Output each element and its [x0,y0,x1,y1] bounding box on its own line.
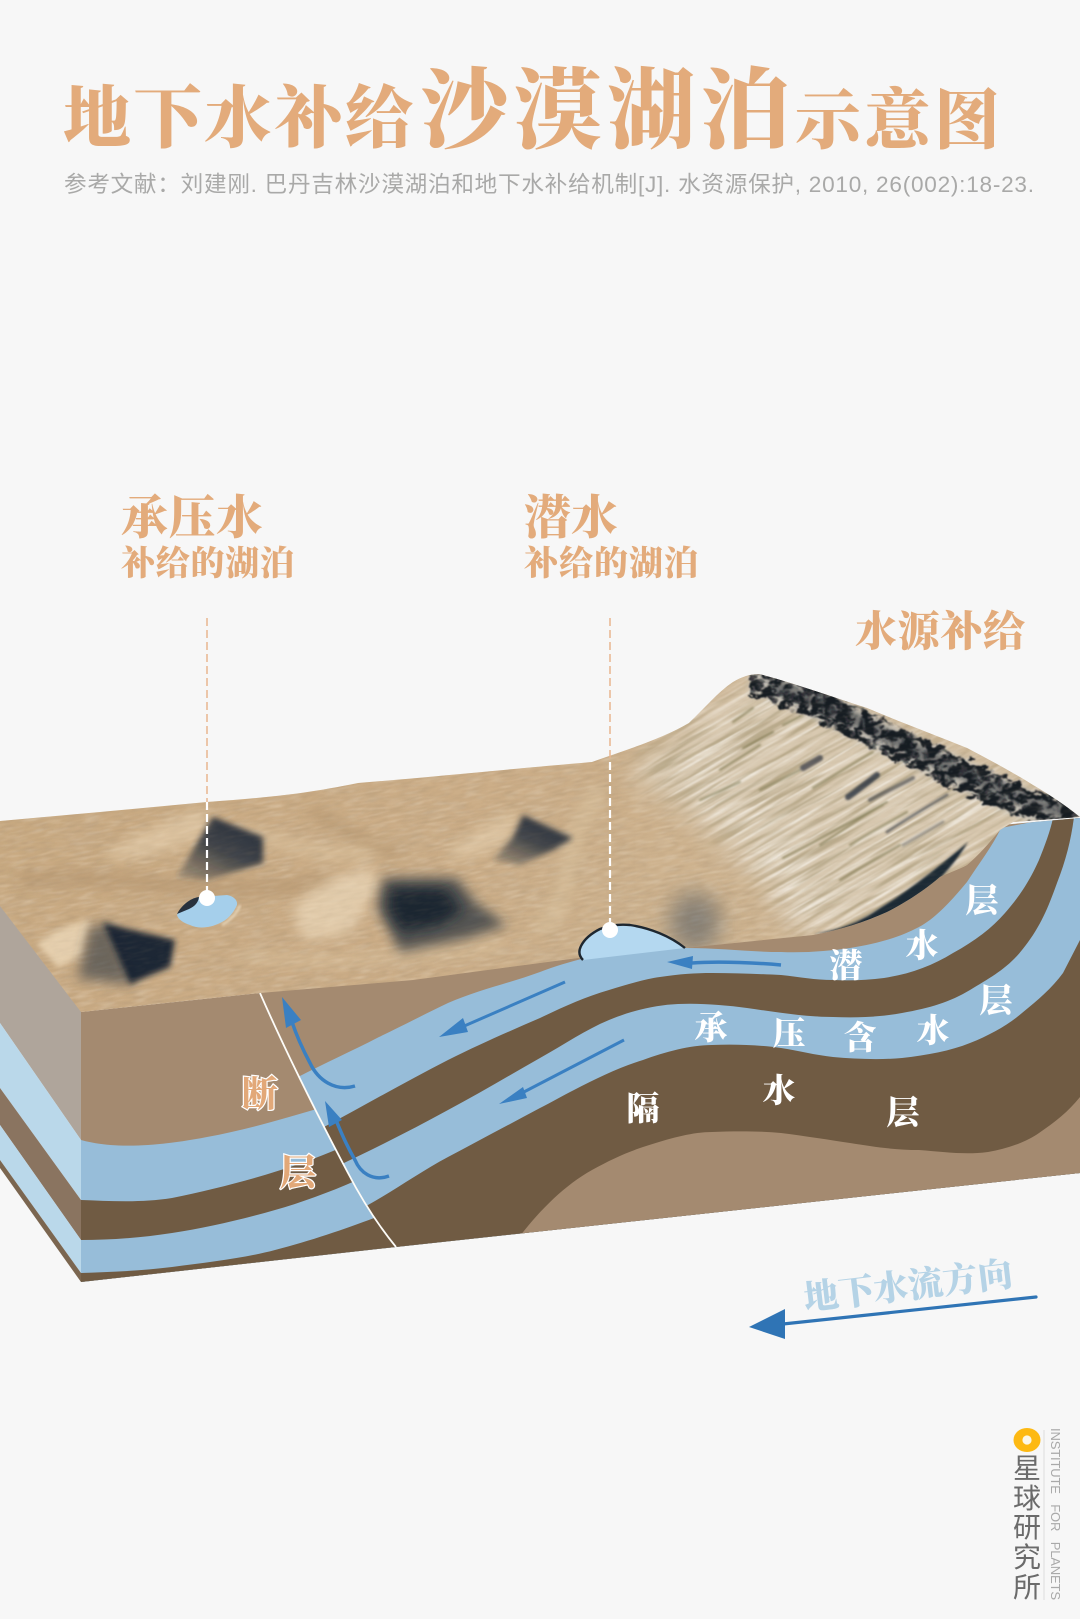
left side face [0,900,81,1282]
block diagram [0,674,1080,1282]
lake fed by confined water [177,895,240,927]
labels: fault: 断 [242,1074,278,1114]
label: phreatic water lake [524,493,698,583]
logo wordmark: 研 [1013,1512,1041,1543]
dune: centre [293,868,507,952]
labels: aquiclude [626,1073,922,1132]
rocky crest [750,680,1080,818]
arrow: upper aquifer flow [667,956,781,969]
dune: back left [105,808,263,880]
labels: confined aquifer: 压 [772,1016,806,1053]
labels: phreatic aquifer [830,883,1000,985]
label: water source recharge: 水源补给 [855,609,1025,656]
labels: phreatic aquifer: 潜 [830,948,862,985]
arrow: upward along fault lower [325,1101,389,1178]
title: 地下水补给 [63,81,413,157]
logo wordmark: 究 [1013,1542,1041,1573]
label: confined water lake: 承压水 [121,493,263,545]
legend: groundwater flow direction [749,1255,1036,1339]
dark fold at slope foot [813,842,968,934]
dune: front left [37,920,175,985]
surface grain [107,681,1071,979]
labels: fault: 层 [280,1153,318,1193]
labels: confined aquifer: 层 [980,983,1014,1020]
arrow: upper aquifer slope flow [439,982,565,1037]
logo mark [1014,1428,1040,1452]
labels: aquiclude: 水 [762,1073,796,1110]
labels: fault [242,1074,318,1193]
label: phreatic water lake: 潜水 [524,493,618,545]
label: confined water lake: 补给的湖泊 [121,545,294,583]
shadow smudge near lake [669,892,721,952]
logo wordmark: 球 [1013,1483,1041,1514]
labels: confined aquifer: 含 [844,1020,876,1057]
dune: back middle [450,812,573,865]
desert terrain surface [0,674,1080,1012]
logo english: INSTITUTE FOR PLANETS [1048,1428,1063,1600]
logo wordmark [1013,1453,1041,1603]
arrow: upward along fault upper [282,997,355,1088]
marker dot: confined lake [199,890,215,906]
marker dot: phreatic lake [602,922,618,938]
label: phreatic water lake: 补给的湖泊 [524,545,698,583]
lake fed by phreatic water [579,925,685,960]
fault line [260,993,396,1247]
arrow: confined aquifer flow [499,1040,624,1104]
labels: confined aquifer: 承 [694,1010,728,1047]
leader line: phreatic lake [609,618,611,930]
leader line: confined lake [206,618,208,898]
labels: confined aquifer [694,983,1014,1057]
cross-section left of fault [81,993,396,1282]
title: 沙漠湖泊 [420,64,789,161]
labels: aquiclude: 层 [886,1095,922,1132]
reference citation: 参考文献：刘建刚. 巴丹吉林沙漠湖泊和地下水补给机制[J]. 水资源保护, 2010, 26(002):18-23. [64,172,1034,197]
labels: phreatic aquifer: 水 [906,928,938,965]
labels: aquiclude: 隔 [626,1091,660,1128]
logo wordmark: 所 [1013,1572,1041,1603]
logo wordmark: 星 [1013,1453,1041,1484]
labels: confined aquifer: 水 [916,1013,950,1050]
label: confined water lake [121,493,294,583]
title [63,64,1000,161]
legend: groundwater flow direction: 地下水流方向 [802,1255,1015,1318]
mountain slope with erosion streaks [624,676,1047,938]
title: 示意图 [795,83,1000,158]
logo: institute for planets [1013,1428,1063,1603]
labels: phreatic aquifer: 层 [966,883,1000,920]
cross-section right of fault [261,818,1080,1247]
